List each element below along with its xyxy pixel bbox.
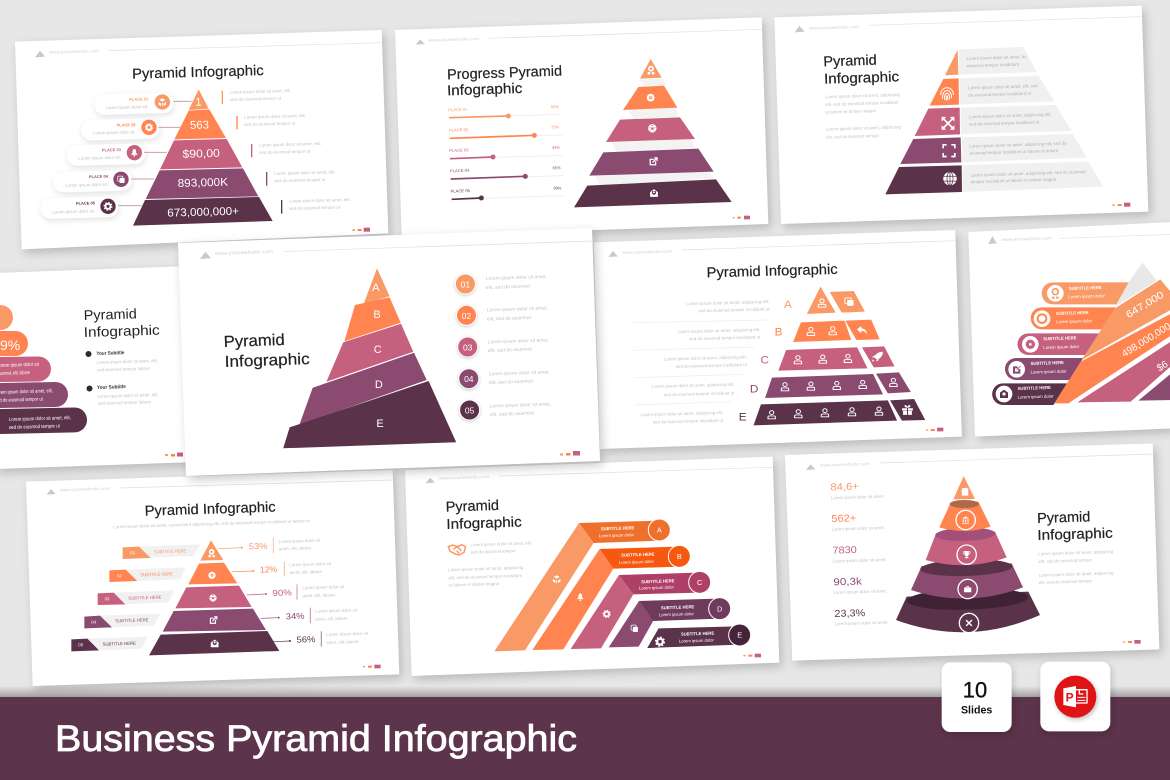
percentages and descriptions: 53% (249, 541, 268, 551)
row text and letters: sed do eiusmod tempor incididunt ut (698, 307, 770, 313)
page marks (165, 452, 183, 456)
page marks (743, 654, 761, 657)
stacked pills: 9% (0, 337, 20, 353)
right descriptions: Lorem ipsum dolor sit amet, elit, (259, 141, 321, 148)
slide background (26, 470, 399, 686)
slide title: Pyramid (1037, 509, 1091, 527)
slide title (445, 498, 522, 533)
percentages and descriptions (218, 538, 369, 647)
gray text bands: Lorem ipsum dolor sit amet, adipiscing elit, sed do (969, 141, 1067, 149)
header logo (988, 236, 997, 244)
row text and letters: sed do eiusmod tempor incididunt ut (689, 335, 761, 341)
percentages and descriptions: Lorem ipsum dolor sit (303, 584, 345, 590)
pyramid with values: 673,000,000+ (167, 206, 240, 220)
description text (1038, 549, 1114, 585)
header rule (879, 454, 1153, 463)
header logo (35, 51, 45, 57)
numbered list: Lorem ipsum dolor sit amet, (490, 401, 551, 410)
label bands A to E: Lorem ipsum dolor (639, 584, 675, 591)
slide title (1037, 509, 1113, 544)
website url: www.yourwebsite.com (622, 249, 672, 255)
right descriptions: Lorem ipsum dolor sit amet, elit, (230, 88, 291, 95)
website url: www.yourwebsite.com (49, 48, 99, 55)
percentages and descriptions: 90% (272, 587, 292, 598)
header rule (489, 29, 762, 38)
page marks (560, 451, 580, 456)
intro text: elit, sed do eiusmod tempor incididunt (449, 573, 523, 580)
right descriptions: sed do eiusmod tempor ut (274, 177, 326, 183)
label bands A to E: C (697, 578, 703, 587)
icon: handshake (448, 545, 465, 555)
intro text: elit, sed do eiusmod tempor (826, 133, 880, 140)
label bands A to E: A (657, 526, 662, 535)
place pills: PLACE 05 (76, 200, 96, 206)
slide background (968, 222, 1170, 437)
header logo (47, 489, 56, 495)
numbered list: Lorem ipsum dolor sit amet, (486, 274, 547, 282)
label bands A to E: E (737, 631, 742, 640)
place pills: Lorem ipsum dolor sit, (52, 208, 95, 215)
progress bars: 65% (553, 165, 561, 170)
diagonal pyramid bands: $6 (1155, 359, 1170, 374)
gray text bands (959, 47, 1103, 192)
numbered list: 03 (463, 342, 473, 352)
gray text bands: eiusmod tempor incididunt (967, 62, 1020, 68)
place pills: Lorem ipsum dolor sit, (93, 129, 136, 136)
row text and letters: Lorem ipsum dolor sit amet, adipiscing elit, (641, 410, 723, 417)
numbered list: elit, sed do eiusmod (486, 283, 530, 291)
slide title: Pyramid (83, 305, 137, 323)
header logo (608, 251, 618, 257)
statistics column: 84,6+ (830, 481, 859, 493)
statistics column: Lorem ipsum dolor sit amet, (835, 620, 889, 626)
subtitle tags: 02 (117, 573, 122, 578)
progress bars: PLACE 05 (451, 188, 471, 194)
numbered list: elit, sed do eiusmod (490, 410, 534, 418)
right descriptions: Lorem ipsum dolor sit amet, elit, (289, 197, 351, 204)
progress bars: 39% (553, 185, 562, 191)
panel: slide 10 cone pyramid (785, 443, 1159, 661)
label bands A to E: B (677, 552, 682, 561)
slide background (785, 443, 1159, 661)
numbered list (455, 274, 551, 420)
header logo (795, 26, 805, 32)
row text and letters: sed do eiusmod tempor incididunt ut (664, 391, 735, 397)
header logo (806, 464, 815, 470)
label bands A to E: SUBTITLE HERE (641, 578, 675, 584)
subtitle tags: SUBTITLE HERE (154, 548, 186, 554)
subtitle pills (992, 282, 1132, 405)
label bands A to E: Lorem ipsum dolor (659, 611, 695, 617)
intro text: elit, sed do eiusmod tempor incididunt (825, 100, 899, 107)
page marks (1123, 640, 1141, 644)
statistics column (830, 481, 889, 626)
percentages and descriptions: Lorem ipsum dolor sit (326, 631, 369, 637)
badge: 10 slides (942, 662, 1012, 732)
intro text: ut labore et dolore magna (825, 108, 877, 115)
subtitles: sed eiusmod tempor labore (98, 399, 151, 406)
place pills: Lorem ipsum dolor sit, (78, 155, 121, 161)
diagonal pyramid bands: 647,000 (1124, 289, 1167, 321)
panel: far right slide diagonal pyramid (968, 222, 1170, 437)
banner shadow (0, 686, 1170, 697)
row text and letters: Lorem ipsum dolor sit amet, adipiscing elit, (678, 327, 760, 334)
footer banner (0, 697, 1170, 780)
percentages and descriptions: amet, elit, labore (326, 639, 359, 645)
subtitle pills: SUBTITLE HERE (1031, 360, 1064, 366)
gray text bands: do eiusmod tempor incididunt ut (968, 91, 1032, 98)
cone pyramid (896, 476, 1040, 633)
website url: www.yourwebsite.com (1002, 235, 1052, 242)
panel: slide 6 pyramid with percentages (26, 470, 399, 686)
row text and letters: B (775, 327, 783, 338)
progress bars: PLACE 01 (448, 107, 468, 112)
gray text bands: sed do eiusmod tempor incididunt ut (969, 119, 1040, 127)
place pills: PLACE 02 (116, 122, 136, 128)
slide background (0, 266, 196, 469)
place pills: Lorem ipsum dolor sit, (65, 182, 108, 188)
gray text bands: Lorem ipsum dolor sit amet, do (967, 54, 1027, 61)
slide title: Pyramid (823, 53, 877, 70)
pyramid A to E: B (373, 309, 381, 321)
label bands A to E (579, 519, 751, 648)
place pills: PLACE 01 (129, 96, 149, 102)
place pills: Lorem ipsum dolor sit, (106, 104, 148, 110)
header rule (869, 17, 1142, 25)
label bands A to E: Lorem ipsum dolor (679, 637, 715, 644)
slide title (83, 305, 160, 340)
percentages and descriptions: Lorem ipsum dolor sit (289, 561, 332, 567)
slide title: Infographic (447, 81, 523, 99)
subtitle tags: 03 (105, 596, 110, 601)
label bands A to E: Lorem ipsum dolor (599, 532, 635, 538)
diagonal pyramid bands (1054, 263, 1170, 403)
pyramid A to E: A (372, 282, 380, 294)
pyramid A to E: D (375, 379, 383, 391)
header rule (682, 241, 954, 250)
header rule (499, 467, 773, 476)
numbered list: 02 (462, 311, 471, 321)
subtitles (86, 350, 158, 406)
header rule (1060, 234, 1170, 238)
place pills (40, 92, 192, 219)
stacked pills (0, 305, 87, 435)
right descriptions (222, 88, 351, 214)
row text and letters: A (784, 299, 792, 311)
slide title: Infographic (224, 351, 310, 371)
panel: central featured slide (178, 228, 600, 476)
main heading: Business Pyramid Infographic (55, 718, 577, 759)
header rule (108, 43, 382, 51)
gray text bands: eiusmod tempor incididunt ut labore et dolore (970, 148, 1059, 156)
subtitle tags: 04 (91, 619, 97, 625)
slide background (15, 30, 388, 249)
statistics column: 90,3k (833, 576, 862, 588)
slide title: Progress Pyramid (447, 64, 562, 83)
slide title: Infographic (446, 515, 522, 533)
label bands A to E: SUBTITLE HERE (601, 525, 634, 531)
subtitles: Your Subtitle (96, 350, 125, 357)
row text and letters: sed do eiusmod tempor incididunt ut (676, 362, 748, 369)
label bands A to E: SUBTITLE HERE (681, 631, 714, 637)
numbered list: elit, sed do eiusmod (488, 346, 532, 354)
slide title: Pyramid Infographic (132, 63, 264, 83)
statistics column: 23,3% (834, 608, 865, 620)
progress bars: PLACE 04 (450, 168, 470, 173)
header logo (200, 252, 211, 259)
pyramid with values: 893,000K (178, 177, 229, 190)
gray text bands: Lorem ipsum dolor sit amet, adipiscing elit, sed do eiusmod (971, 169, 1086, 178)
slide background (774, 6, 1148, 224)
slide title (823, 53, 899, 88)
subtitle tags (71, 544, 200, 651)
label bands A to E: D (717, 604, 722, 613)
progress bars: 44% (552, 145, 560, 150)
subtitle tags: SUBTITLE HERE (141, 571, 173, 577)
intro text (448, 540, 532, 588)
staircase bars (494, 523, 672, 651)
page marks (926, 428, 943, 431)
subtitle tags: 01 (130, 550, 136, 555)
panel: slide ABC people pyramid (594, 230, 962, 449)
pyramid with values: 1 (195, 97, 202, 109)
header rule (120, 480, 393, 488)
gray text bands: Lorem ipsum dolor sit amet, adipiscing elit, (969, 112, 1052, 119)
numbered list: Lorem ipsum dolor sit amet, (488, 337, 549, 346)
numbered list: elit, sed do eiusmod (487, 315, 531, 322)
panel: slide 3 split pyramid (774, 6, 1148, 224)
page marks (363, 665, 381, 668)
pyramid A to E: C (374, 344, 382, 356)
subtitle pills: SUBTITLE HERE (1018, 385, 1051, 391)
percentages and descriptions: 56% (296, 634, 316, 645)
website url: www.yourwebsite.com (820, 461, 870, 468)
statistics column: 562+ (831, 513, 856, 525)
intro text (825, 92, 902, 140)
subtitles: Lorem ipsum dolor sit amet, elit, (97, 392, 158, 399)
slide title: Infographic (83, 322, 160, 340)
subtitle tags: SUBTITLE HERE (128, 595, 162, 601)
label bands A to E: SUBTITLE HERE (661, 604, 694, 610)
intro text: sed do eiusmod tempor (471, 548, 516, 555)
pyramid with values (133, 89, 273, 226)
panel: slide 2 progress pyramid (395, 17, 768, 237)
percentages and descriptions: 34% (286, 611, 305, 621)
numbered list: 01 (461, 280, 470, 290)
icon column (830, 291, 925, 421)
right descriptions: Lorem ipsum dolor sit amet, elit, (274, 169, 335, 176)
row text and letters: E (739, 412, 747, 423)
slide title: Pyramid (223, 332, 285, 351)
slide title: Infographic (824, 69, 899, 88)
subtitle pills: SUBTITLE HERE (1056, 310, 1089, 316)
progress bars: 72% (551, 124, 559, 130)
pyramid (574, 59, 732, 207)
subtitle tags: SUBTITLE HERE (115, 617, 149, 623)
description text: Lorem ipsum dolor sit amet, adipiscing (1038, 549, 1114, 556)
gray text bands: Lorem ipsum dolor sit amet, elit, sed (968, 83, 1038, 90)
numbered list: 04 (464, 374, 474, 384)
header logo (426, 478, 435, 483)
subtitle pills: SUBTITLE HERE (1069, 285, 1102, 291)
people pyramid (754, 287, 897, 425)
website url: www.yourwebsite.com (215, 249, 273, 257)
website url: www.yourwebsite.com (428, 36, 480, 43)
header logo (416, 39, 425, 45)
page marks (1112, 203, 1130, 207)
right descriptions: sed do eiusmod tempor ut (230, 96, 282, 102)
website url: www.yourwebsite.com (60, 486, 110, 492)
label bands A to E: Lorem ipsum dolor (619, 559, 655, 565)
row text and letters: D (750, 384, 758, 395)
intro text: Lorem ipsum dolor sit amet, adipiscing (826, 124, 902, 132)
badge: PowerPoint (1040, 662, 1110, 731)
slide title: Pyramid Infographic (144, 500, 276, 520)
numbered list: elit, sed do eiusmod (489, 378, 533, 386)
numbered list: Lorem ipsum dolor sit amet, (487, 305, 548, 314)
percentages and descriptions: amet, elit, labore (290, 569, 323, 575)
subtitle pills: Lorem ipsum dolor (1068, 293, 1106, 299)
slide background (594, 230, 962, 449)
panel: slide 7 staircase pyramid (405, 457, 779, 676)
stacked pills: sed do eiusmod tempor ut (9, 423, 61, 431)
slide title (447, 64, 562, 99)
intro text: Lorem ipsum dolor sit amet, adipiscing (825, 92, 901, 99)
gray text bands: tempor incididunt ut labore et dolore magna (971, 177, 1057, 184)
pyramid with values: 563 (190, 119, 209, 132)
slide title: Pyramid (445, 498, 499, 516)
right descriptions: Lorem ipsum dolor sit amet, elit, (244, 113, 306, 120)
subtitle pills: Lorem ipsum dolor (1018, 394, 1054, 400)
intro text: Lorem ipsum dolor sit amet, elit, (471, 540, 532, 547)
description text: Lorem ipsum dolor sit amet, adipiscing (1039, 570, 1114, 578)
percentages and descriptions: Lorem ipsum dolor sit (315, 607, 358, 614)
place pills: PLACE 04 (89, 174, 109, 179)
intro text: Lorem ipsum dolor sit amet, adipiscing (448, 565, 524, 572)
percentages and descriptions: amet, elit, labore (303, 592, 336, 598)
label bands A to E: SUBTITLE HERE (621, 552, 655, 558)
subtitle pills: Lorem ipsum dolor (1031, 369, 1067, 375)
statistics column: 7830 (832, 545, 857, 557)
description text: elit, sed do eiusmod tempor (1039, 578, 1093, 585)
header rule (284, 241, 592, 252)
page marks (352, 228, 370, 232)
statistics column: Lorem ipsum dolor sit amet, (832, 525, 885, 532)
slide background (395, 17, 768, 237)
row text and letters: sed do eiusmod tempor incididunt ut (653, 418, 724, 425)
stacked pills: Lorem ipsum dolor sit amet, elit, (9, 415, 71, 423)
right descriptions: sed do eiusmod tempor ut (289, 205, 341, 211)
statistics column: Lorem ipsum dolor sit amet, (833, 557, 887, 564)
statistics column: Lorem ipsum dolor sit amet, (831, 494, 884, 500)
numbered list: 05 (465, 406, 475, 416)
percentages and descriptions: amet, elit, labore (279, 545, 312, 551)
right descriptions: sed do eiusmod tempor ut (244, 121, 296, 127)
pyramid (149, 540, 279, 655)
row text and letters: Lorem ipsum dolor sit amet, adipiscing elit, (664, 355, 747, 361)
intro text: ut labore et dolore magna (449, 581, 500, 588)
progress bars: 50% (551, 104, 559, 109)
website url: www.yourwebsite.com (809, 24, 859, 31)
slide background (405, 457, 779, 676)
description text: elit, sed do eiusmod tempor (1039, 557, 1093, 564)
right descriptions: sed do eiusmod tempor ut (259, 149, 311, 155)
place pills: PLACE 03 (102, 147, 122, 153)
pyramid A to E (283, 268, 456, 448)
subtitles: sed eiusmod tempor labore (97, 366, 150, 372)
subtitle tags: 05 (78, 642, 84, 647)
percentages and descriptions: Lorem ipsum dolor sit (279, 538, 321, 544)
row text and letters: Lorem ipsum dolor sit amet, adipiscing elit, (652, 382, 734, 389)
subtitles: Your Subtitle (97, 384, 126, 391)
row text and letters: C (761, 355, 769, 367)
page marks (733, 216, 750, 219)
subtitle pills: Lorem ipsum dolor (1056, 318, 1093, 324)
row text and letters: Lorem ipsum dolor sit amet, adipiscing elit, (686, 299, 769, 306)
slide background (178, 228, 600, 476)
website url: www.yourwebsite.com (439, 474, 489, 481)
panel: slide 1 pyramid with places (15, 30, 388, 249)
slide title: Infographic (1037, 526, 1113, 544)
slide title (223, 332, 310, 371)
subtitle pills: Lorem ipsum dolor (1043, 344, 1080, 350)
subtitle pills: SUBTITLE HERE (1043, 335, 1077, 341)
progress bars: PLACE 03 (449, 147, 469, 153)
subtitles: Lorem ipsum dolor sit amet, elit, (97, 358, 158, 365)
badge: PowerPoint: P (1066, 691, 1074, 705)
slide title: Pyramid Infographic (706, 262, 838, 281)
progress bars: PLACE 02 (449, 127, 469, 133)
percentages and descriptions: 12% (260, 564, 278, 575)
colored pyramid (885, 50, 962, 194)
statistics column: Lorem ipsum dolor sit amet, (834, 588, 887, 595)
row text and letters (633, 299, 792, 425)
badge: 10 slides: Slides (961, 705, 992, 717)
subtitle tags: SUBTITLE HERE (103, 641, 136, 647)
percentages and descriptions: amet, elit, labore (315, 616, 348, 622)
numbered list: Lorem ipsum dolor sit amet, (489, 369, 550, 378)
panel: left slide stacked pills (0, 266, 196, 469)
progress bars (448, 104, 564, 200)
pyramid with values: $90,00 (182, 148, 220, 161)
subtitle text: Lorem ipsum dolor sit amet, consectetur adipiscing elit, sed do eiusmod tempor incididunt ut labore et (113, 518, 311, 529)
pyramid A to E: E (376, 418, 384, 430)
badge: 10 slides: 10 (963, 677, 987, 702)
